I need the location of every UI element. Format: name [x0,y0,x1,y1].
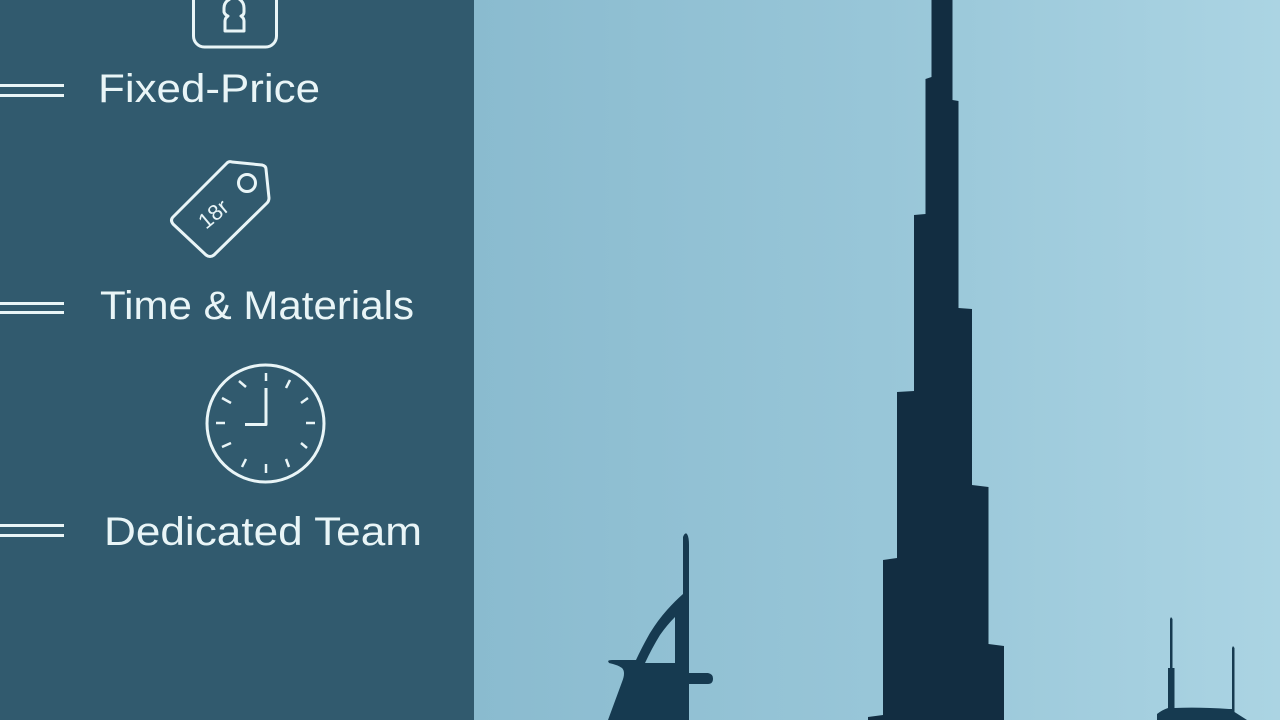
building: twin-antenna tower [1157,617,1247,720]
building: Burj Al Arab sail hotel [608,533,713,720]
skyline: Dubai silhouettes [608,0,1247,720]
icon: price tag [172,162,269,256]
icon: clock [207,365,324,482]
label: Dedicated Team [0,510,422,554]
label: Dedicated Team: Dedicated Team [104,510,422,554]
panel: pricing models [0,0,474,720]
background: sky panel [474,0,1280,720]
icon: padlock [194,0,276,47]
building: Burj Khalifa tower [868,0,1004,720]
icon: price tag: 18r [193,194,234,234]
label: Fixed-Price [0,67,320,111]
label: Time & Materials: Time & Materials [100,284,414,328]
label: Fixed-Price: Fixed-Price [98,67,320,111]
